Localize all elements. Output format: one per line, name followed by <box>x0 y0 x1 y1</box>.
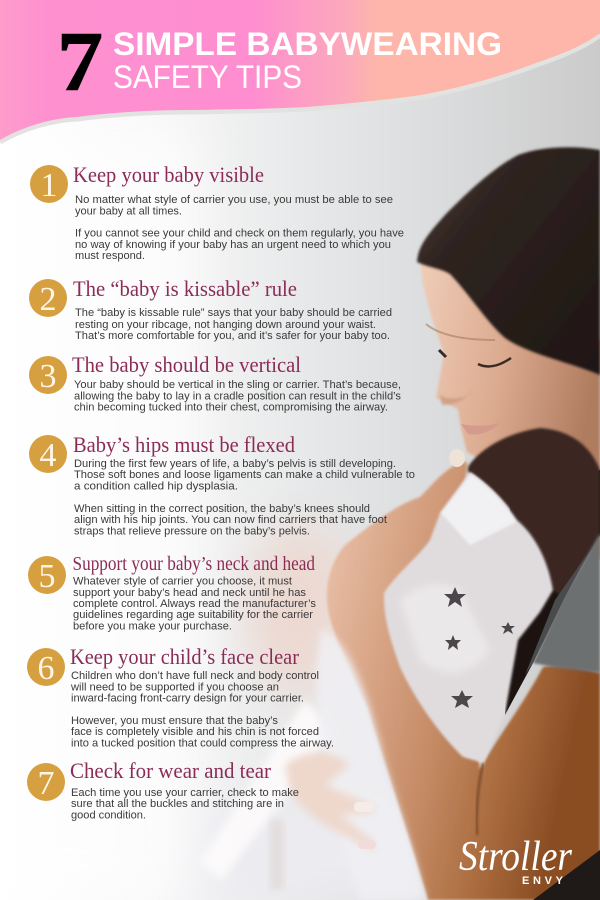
tip 6: will need to be supported if you choose an <box>70 682 279 694</box>
swaddle stars <box>444 587 515 708</box>
photo: mother holding baby <box>285 147 600 900</box>
tip 4: straps that relieve pressure on the baby’s pelvis. <box>74 526 310 538</box>
mother's eye, nose and lips <box>426 324 511 435</box>
tip 3: allowing the baby to lay in a cradle position can result in the child’s <box>74 390 402 402</box>
tip 5: support your baby’s head and neck until he has <box>73 587 306 599</box>
tip 4: Those soft bones and loose ligaments can make a child vulnerable to <box>74 469 415 481</box>
tip 6: However, you must ensure that the baby’s <box>71 715 278 727</box>
second swaddle and hand <box>285 628 425 900</box>
arm <box>327 462 600 900</box>
swaddle blanket <box>384 472 553 763</box>
tip 2: The “baby is kissable” rule <box>73 276 297 301</box>
mother's hair <box>417 147 600 375</box>
tip 5: 5 <box>38 558 56 595</box>
tip 5 <box>28 553 316 632</box>
tip 3: chin becoming tucked into their chest, compromising the airway. <box>74 402 388 414</box>
tip 4: When sitting in the correct position, the baby’s knees should <box>74 503 370 515</box>
tip 5: Whatever style of carrier you choose, it must <box>73 576 292 588</box>
tip 4: During the first few years of life, a baby’s pelvis is still developing. <box>74 458 396 470</box>
tip 1: 1 <box>40 167 58 204</box>
tip 1: your baby at all times. <box>75 206 182 218</box>
tip 1: No matter what style of carrier you use, you must be able to see <box>75 194 393 206</box>
tip 2 <box>29 276 392 342</box>
tip 6: into a tucked position that could compress the airway. <box>71 738 334 750</box>
tip 5: guidelines regarding age suitability for the carrier <box>73 609 313 621</box>
tip 7: Check for wear and tear <box>70 758 272 783</box>
tip 5: Support your baby’s neck and head <box>72 553 315 575</box>
shirt <box>525 533 600 675</box>
baby's head <box>468 428 600 597</box>
tip 2: That’s more comfortable for you, and it’s safer for your baby too. <box>75 330 390 342</box>
tip 3 <box>29 352 402 414</box>
tip 5: complete control. Always read the manufacturer’s <box>73 598 316 610</box>
tip 7: Each time you use your carrier, check to make <box>71 787 299 799</box>
title line 1: SIMPLE BABYWEARING <box>113 26 502 62</box>
tip 1: If you cannot see your child and check on them regularly, you have <box>75 228 404 240</box>
tip 4: align with his hip joints. You can now find carriers that have foot <box>74 514 387 526</box>
tip 7: 7 <box>38 765 54 802</box>
tip 7 <box>27 758 299 822</box>
tip 4: 4 <box>40 437 56 474</box>
logo: Stroller Envy: Stroller <box>459 834 573 880</box>
title number 7: 7 <box>57 15 103 109</box>
lower right dark corner <box>533 850 600 900</box>
tip 6: 6 <box>38 650 54 687</box>
tip 2: 2 <box>40 281 56 318</box>
tip 6: inward-facing front-carry design for your carrier. <box>71 692 304 704</box>
tip 3: 3 <box>40 358 56 395</box>
tip 2: resting on your ribcage, not hanging down around your waist. <box>75 319 376 331</box>
crease of arm <box>477 763 483 835</box>
tip 1: no way of knowing if your baby has an urgent need to which you <box>75 239 391 251</box>
tip 6: Keep your child’s face clear <box>70 644 300 669</box>
tip 1: Keep your baby visible <box>73 162 264 187</box>
tip 7: sure that all the buckles and stitching are in <box>71 798 284 810</box>
tip 1 <box>30 162 404 262</box>
logo: Stroller Envy: ENVY <box>522 875 564 887</box>
tip 6 <box>27 644 334 750</box>
tip 1: must respond. <box>75 250 145 262</box>
thumb nail <box>449 449 465 467</box>
title line 2: SAFETY TIPS <box>113 59 302 95</box>
tip 4: a condition called hip dysplasia. <box>74 480 238 492</box>
tip 4: Baby’s hips must be flexed <box>73 432 295 457</box>
dark area behind baby <box>505 470 600 715</box>
tip 6: face is completely visible and his chin is not forced <box>71 726 319 738</box>
tip 3: Your baby should be vertical in the sling or carrier. That’s because, <box>74 379 401 391</box>
header band <box>0 0 600 142</box>
tip 4 <box>29 432 415 538</box>
tip 5: before you make your purchase. <box>73 620 232 632</box>
tip 7: good condition. <box>71 810 146 822</box>
mother's face <box>420 258 600 560</box>
tip 2: The “baby is kissable rule” says that your baby should be carried <box>75 307 392 319</box>
tip 6: Children who don’t have full neck and body control <box>71 670 319 682</box>
tip 3: The baby should be vertical <box>72 352 301 377</box>
